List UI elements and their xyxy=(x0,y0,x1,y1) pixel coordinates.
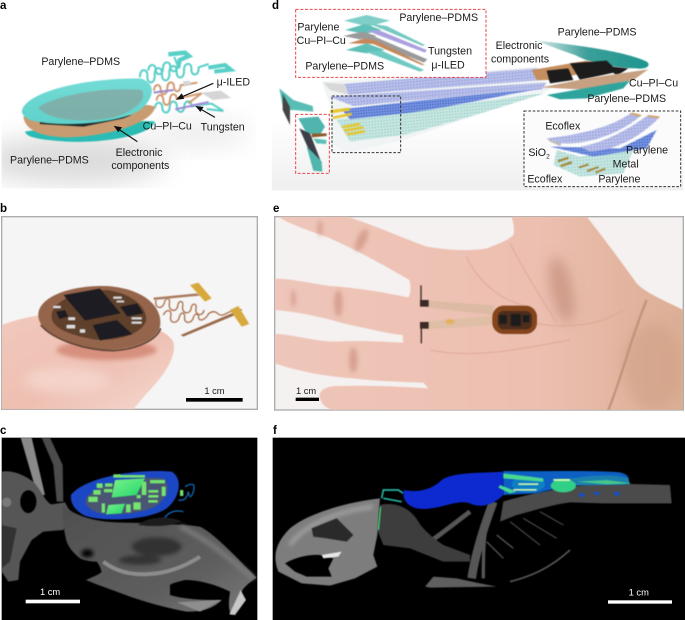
cap: upper parylene xyxy=(537,41,649,69)
second green chip xyxy=(106,504,125,514)
second chip xyxy=(93,320,133,341)
small components xyxy=(53,297,142,333)
scale bar label: 1 cm xyxy=(204,386,225,396)
label: Parylene-PDMS bottom: Parylene–PDMS xyxy=(10,155,89,167)
lower electrode xyxy=(420,322,429,343)
scale bar xyxy=(26,600,80,603)
green fibre along skull xyxy=(378,507,381,530)
lower parylene xyxy=(547,81,630,99)
grey interior under components xyxy=(86,478,168,514)
label: Parylene-PDMS lower right: Parylene–PDMS xyxy=(587,93,666,105)
palm lines xyxy=(430,243,623,354)
label: electronic components: components xyxy=(491,53,549,65)
mouth cavity xyxy=(285,555,333,577)
fibre wires xyxy=(163,484,194,520)
panel letter e: e xyxy=(273,203,279,215)
label: Cu-PI-Cu inset: Cu–PI–Cu xyxy=(297,35,346,47)
upper electrode xyxy=(153,283,212,302)
lower copper board xyxy=(542,69,648,90)
black dashed inset box xyxy=(524,111,681,187)
finger joints xyxy=(291,220,371,373)
red dashed small box xyxy=(296,114,329,173)
small chip xyxy=(56,310,68,319)
label: Cu-PI-Cu right: Cu–PI–Cu xyxy=(629,78,678,90)
label: Parylene-PDMS top: Parylene–PDMS xyxy=(41,56,120,68)
label: electronic components: Electronic xyxy=(496,40,542,52)
label: Ecoflex top: Ecoflex xyxy=(545,121,581,133)
pale strip base xyxy=(322,67,550,153)
backdrop shading xyxy=(272,156,683,190)
photo background xyxy=(2,217,257,409)
black backdrop xyxy=(2,438,257,620)
label: Parylene-PDMS inset: Parylene–PDMS xyxy=(399,12,478,24)
device chips xyxy=(499,314,529,326)
component specks xyxy=(513,479,570,491)
label: Tungsten inset: Tungsten xyxy=(428,45,472,57)
scale bar xyxy=(186,398,243,402)
third chip xyxy=(120,303,143,317)
label: Parylene-PDMS right: Parylene–PDMS xyxy=(558,27,636,39)
panel f: micro-CT whole body view xyxy=(273,438,685,620)
label: Metal: Metal xyxy=(613,158,639,170)
label: SiO2: 2 xyxy=(546,153,550,160)
copper serpentine middle layer xyxy=(154,82,202,105)
inner window of upper disc xyxy=(38,89,143,120)
arrow: tungsten xyxy=(197,107,215,117)
strips of device xyxy=(427,301,494,329)
incisor teeth xyxy=(177,590,246,615)
device capsule xyxy=(492,306,537,334)
palm and wrist xyxy=(275,217,683,410)
thenar crease shadow xyxy=(544,255,683,410)
label: Tungsten: Tungsten xyxy=(201,122,245,134)
snout highlight xyxy=(180,527,253,578)
panel a: exploded view of head-mounted device xyxy=(2,50,250,188)
silver edge xyxy=(323,83,348,95)
red dashed inset box xyxy=(296,9,486,77)
wrist crease xyxy=(608,300,647,410)
soft ground shadow xyxy=(2,118,240,188)
label: Parylene-PDMS inset lower: Parylene–PDMS xyxy=(305,60,384,72)
board xyxy=(52,290,146,340)
head cap of device xyxy=(503,471,629,495)
scale bar xyxy=(296,398,319,401)
second lavender strip xyxy=(329,83,547,106)
black electronic components xyxy=(547,61,628,83)
label: Cu-PI-Cu: Cu–PI–Cu xyxy=(143,121,192,133)
label: Parylene inset: Parylene xyxy=(297,22,339,34)
copper circuit layer xyxy=(23,104,155,137)
black dashed small box xyxy=(332,96,401,153)
yellow electrodes xyxy=(330,108,365,136)
skull highlight xyxy=(290,507,373,545)
eye socket xyxy=(312,518,353,542)
label: Parylene right: Parylene xyxy=(626,144,668,156)
panel letter d: d xyxy=(272,0,279,12)
lower electrode xyxy=(181,306,249,337)
far-left folded electrode layers xyxy=(279,88,327,172)
upper electrode xyxy=(420,285,429,307)
panel letter b: b xyxy=(0,203,7,215)
scale bar label: 1 cm xyxy=(40,587,60,597)
photo background xyxy=(275,217,683,410)
panel letter a: a xyxy=(0,0,7,12)
eye socket and jaw shadow xyxy=(81,537,182,565)
black backdrop xyxy=(273,438,685,620)
lower parylene disc xyxy=(25,121,155,142)
vertebral windows xyxy=(579,492,620,497)
finger xyxy=(2,313,174,409)
label: electronic components: Electronic xyxy=(116,147,162,159)
electronic components xyxy=(40,115,132,127)
lower jaw opening xyxy=(229,594,230,596)
panel e: device on palm photograph xyxy=(275,217,683,410)
panel c: micro-CT skull lateral view xyxy=(2,438,257,620)
label: electronic components: components xyxy=(111,160,169,172)
lower teal serpentine strip xyxy=(337,93,547,142)
upper lavender strip xyxy=(344,68,542,95)
panel b: device on fingertip photograph xyxy=(2,217,257,409)
connector serpentine xyxy=(382,490,403,502)
translucent encapsulation xyxy=(38,286,160,350)
skull xyxy=(63,505,257,614)
rim of capsule xyxy=(41,325,161,351)
blue encapsulation strip xyxy=(403,472,503,509)
teal parylene serpentine top layer xyxy=(140,53,231,113)
arrow: micro-ILED xyxy=(177,83,213,99)
label: Parylene bottom: Parylene xyxy=(598,173,640,185)
scale bar label: 1 cm xyxy=(629,587,649,597)
dark socket behind device xyxy=(138,518,182,526)
upper parylene disc xyxy=(22,78,152,124)
panel letter f: f xyxy=(273,425,277,437)
green electronic cluster xyxy=(498,473,632,493)
spine vertebrae xyxy=(500,483,672,522)
copper serpentine wires xyxy=(156,299,242,322)
skull xyxy=(275,498,380,586)
label: Ecoflex bottom: Ecoflex xyxy=(527,173,563,185)
label: micro-ILED: μ-ILED xyxy=(217,77,250,89)
cheek arch highlight xyxy=(103,557,200,574)
main chip xyxy=(63,288,121,321)
grey tungsten and ILED tabs xyxy=(153,81,231,110)
device board xyxy=(498,311,532,329)
inset fan of strips xyxy=(547,113,660,177)
foot bones xyxy=(425,577,497,588)
label: micro-ILED inset: μ-ILED xyxy=(431,59,465,71)
inset exploded strips xyxy=(343,15,427,72)
label: SiO2: SiO xyxy=(528,147,546,159)
scale bar xyxy=(608,600,672,604)
ribs and shoulder bones xyxy=(430,502,570,582)
panel d: exploded view of spinal device xyxy=(272,0,683,191)
neck and skull back xyxy=(377,504,470,562)
arrow: electronic components xyxy=(115,127,137,142)
teal highlight xyxy=(553,475,630,486)
blue middle serpentine strip xyxy=(342,87,547,119)
main green chip xyxy=(112,478,145,498)
panel letter c: c xyxy=(0,425,7,437)
neck bones xyxy=(2,438,72,582)
copper board xyxy=(532,61,610,80)
device on fingertip xyxy=(38,286,161,351)
green component dots xyxy=(88,474,183,513)
teeth xyxy=(322,552,342,558)
scale bar label: 1 cm xyxy=(296,386,316,396)
blue encapsulation xyxy=(71,471,179,519)
